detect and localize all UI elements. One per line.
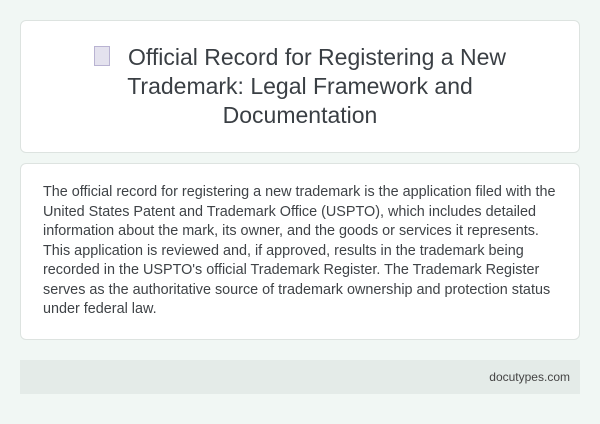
- panel: description: [20, 163, 580, 340]
- footer: [20, 360, 580, 394]
- text block: The official record for registering a new trademark is the application filed with the United States Patent and Trademark Office (USPTO), which includes detailed information about the mark, its owner, and the goods or services it represents. This application is reviewed and, if approved, results in the trademark being recorded in the USPTO's official Trademark Register. The Trademark Register serves as the authoritative source of trademark ownership and protection status under federal law.: [43, 184, 555, 317]
- panel: title card: [20, 20, 580, 153]
- title: Official Record for Registering a New Trademark: Legal Framework and Documentation: [127, 44, 506, 128]
- icon: document: [94, 46, 110, 66]
- footer text: docutypes.com: [489, 370, 570, 384]
